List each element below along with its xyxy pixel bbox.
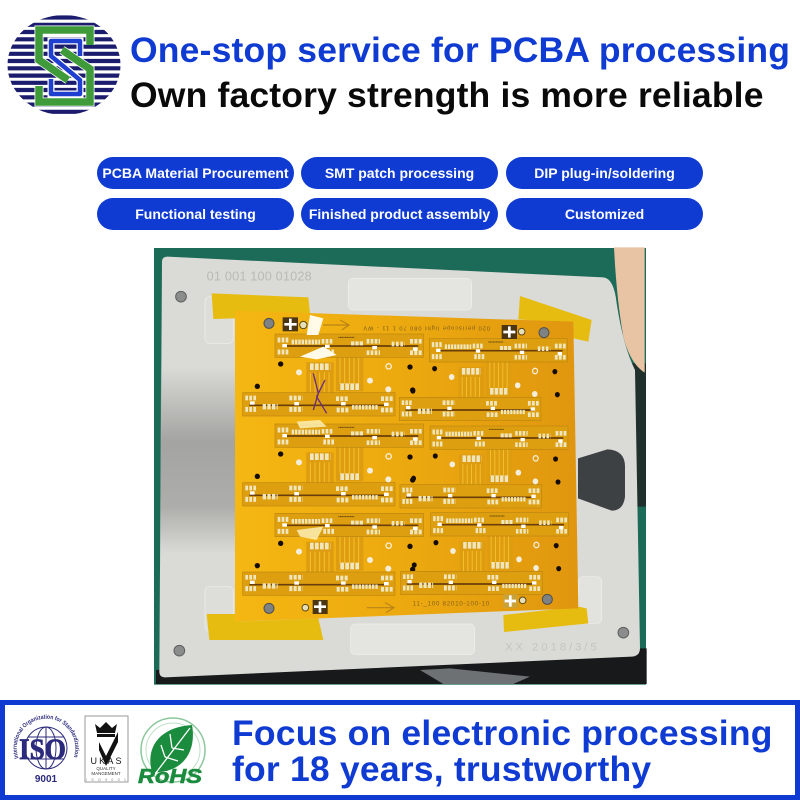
UKAS quality logo bbox=[85, 716, 128, 782]
banner text line 2: for 18 years, trustworthy bbox=[232, 749, 651, 789]
plate cutout bbox=[578, 449, 625, 511]
certification logos bbox=[13, 714, 206, 788]
RoHS leaf logo bbox=[138, 718, 205, 788]
pill: DIP bbox=[506, 157, 703, 189]
pill: assembly: Finished product assembly bbox=[309, 206, 490, 222]
fiducial marks bbox=[283, 317, 526, 614]
service pills bbox=[97, 157, 703, 230]
ISO 9001 logo: 9001 bbox=[35, 774, 58, 785]
bottom banner bbox=[0, 700, 800, 800]
UKAS quality logo: ISO9001 bbox=[86, 778, 126, 782]
plate date mark: XX 2018/3/5 bbox=[505, 642, 597, 654]
glare and marker scribble bbox=[297, 315, 337, 540]
fixture plate bbox=[159, 257, 640, 677]
bottom dark strip bbox=[156, 648, 647, 684]
heading: black subtitle: Own factory strength is more reliable bbox=[130, 75, 764, 115]
UKAS quality logo: QUALITY bbox=[96, 766, 116, 771]
dark right edge bbox=[630, 363, 646, 507]
photo: PCB on fixture plate bbox=[154, 247, 647, 685]
pill: DIP: DIP plug-in/soldering bbox=[534, 165, 675, 181]
pill: customized: Customized bbox=[565, 206, 644, 222]
ISO 9001 logo: International Organization for Standardization bbox=[13, 714, 80, 759]
UKAS quality logo: MANGEMENT bbox=[91, 771, 121, 776]
direction arrows bbox=[323, 320, 394, 613]
UKAS quality logo: UKAS bbox=[90, 756, 122, 766]
pill: SMT: SMT patch processing bbox=[325, 165, 474, 181]
pill: procurement bbox=[97, 157, 294, 189]
yellow flex PCB panel bbox=[235, 311, 578, 622]
board silk text bottom: 11-_100 82010-100-10 bbox=[413, 601, 490, 608]
pill: SMT bbox=[301, 157, 498, 189]
RoHS leaf logo: RoHS bbox=[138, 766, 203, 788]
pill: assembly bbox=[301, 198, 498, 230]
ISO 9001 logo: ISO bbox=[19, 733, 66, 766]
board silk text top: 020 periscope light 080 70 1 11 - WV bbox=[363, 325, 490, 331]
pill: customized bbox=[506, 198, 703, 230]
embossed pockets bbox=[205, 278, 602, 655]
pill: testing: Functional testing bbox=[135, 206, 256, 222]
ISO 9001 logo bbox=[13, 714, 80, 785]
banner text line 1: Focus on electronic processing bbox=[232, 713, 773, 753]
green mat background bbox=[154, 248, 646, 685]
pill: procurement: PCBA Material Procurement bbox=[102, 165, 289, 181]
plate screws bbox=[174, 291, 629, 656]
heading: blue title: One-stop service for PCBA processing bbox=[130, 30, 790, 70]
logo: striped oval with S bbox=[8, 15, 120, 114]
kapton tape corners bbox=[207, 293, 592, 640]
pill: testing bbox=[97, 198, 294, 230]
circuit modules bbox=[243, 334, 569, 595]
skin at top right bbox=[614, 247, 645, 373]
board screws bbox=[264, 318, 552, 613]
plate part number: 01 001 100 01028 bbox=[207, 270, 312, 284]
